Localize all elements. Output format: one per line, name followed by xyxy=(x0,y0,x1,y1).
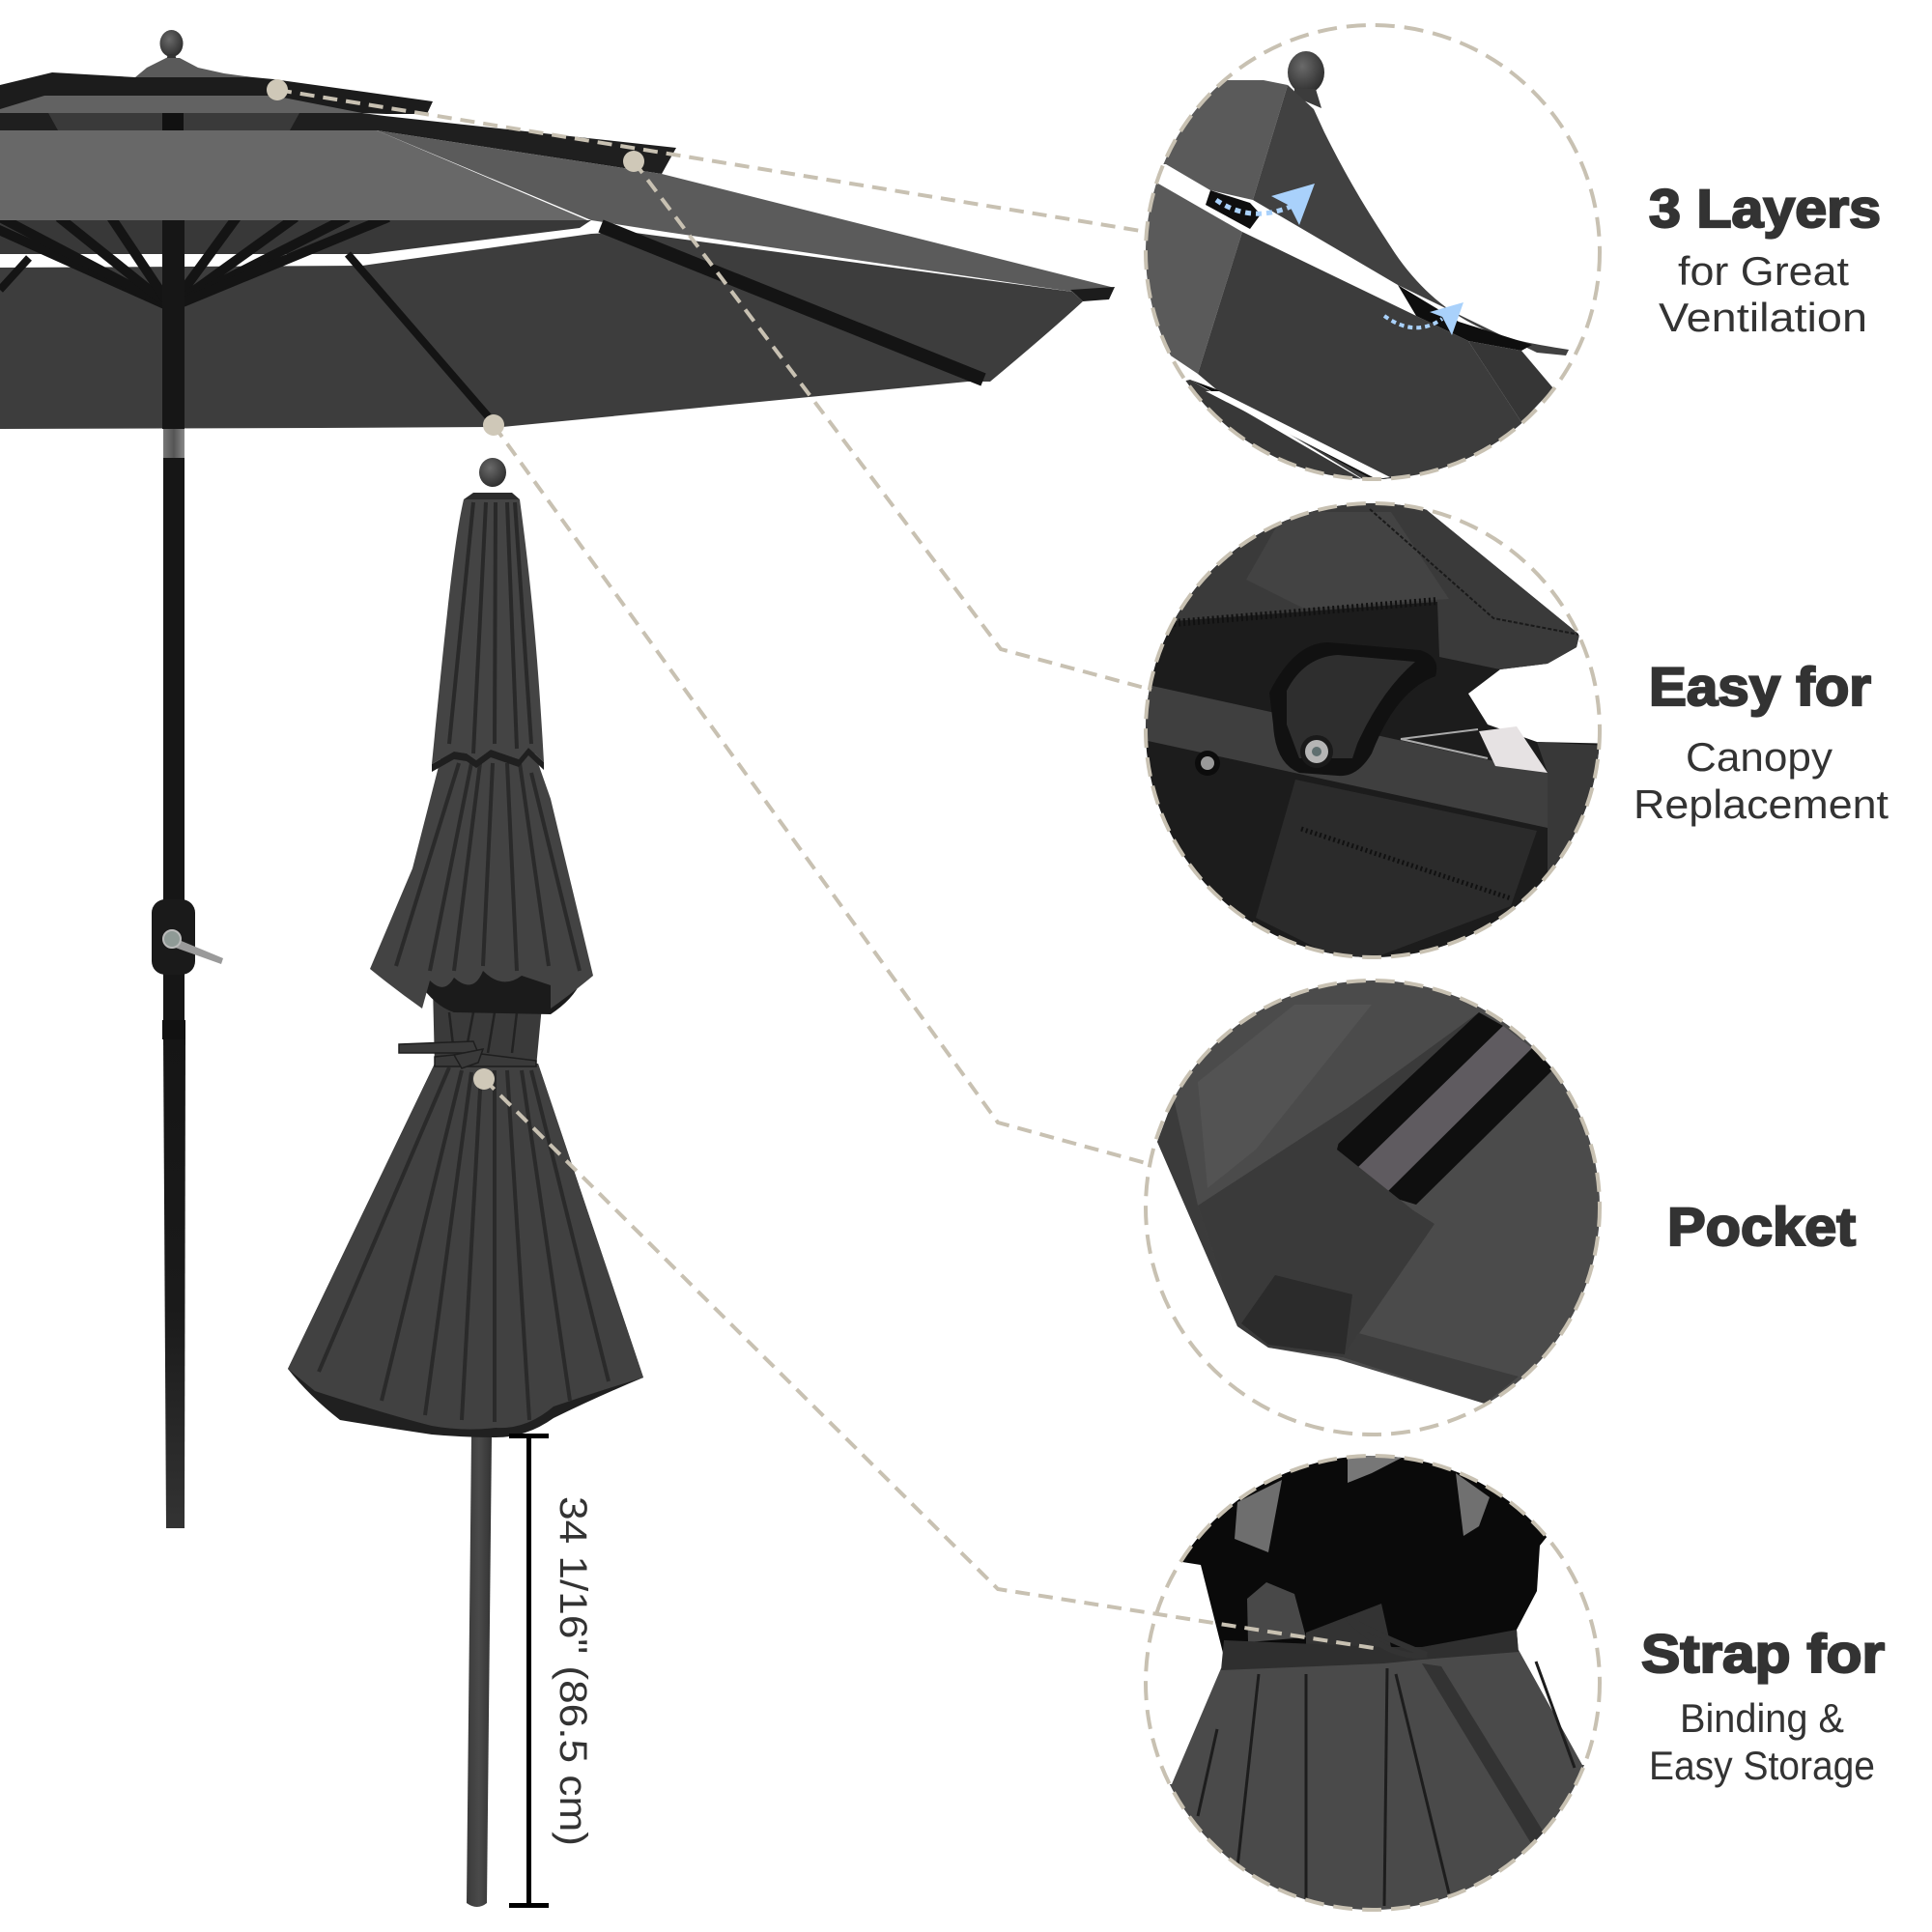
detail circle: strap xyxy=(1111,1401,1642,1932)
pocket xyxy=(1198,1108,1435,1357)
pole height dimension xyxy=(509,1434,594,1908)
callout dots xyxy=(267,79,644,1090)
canopy tip xyxy=(1070,287,1115,301)
airflow arrow lower xyxy=(1384,302,1463,335)
hub and upper pole xyxy=(162,220,185,429)
bottom black strut xyxy=(1190,380,1390,480)
lower main panel xyxy=(1198,232,1522,479)
skirt pleats xyxy=(1198,1662,1575,1906)
text block: easy canopy replacement: Canopy xyxy=(1686,734,1833,780)
detail circle: canopy replacement xyxy=(1146,503,1600,957)
leader line: three layers xyxy=(277,90,1147,232)
wire clip xyxy=(1401,729,1488,758)
middle section xyxy=(370,744,593,1014)
grey fold top xyxy=(1348,1456,1406,1483)
centre pole section xyxy=(162,113,184,130)
top layer panel xyxy=(0,96,362,113)
beam xyxy=(1130,681,1548,828)
fabric highlight xyxy=(1198,1005,1372,1188)
text block: easy canopy replacement xyxy=(1634,656,1889,827)
lower stitched hem xyxy=(1301,829,1511,898)
secondary bolt xyxy=(1195,751,1220,776)
inner grey pleats xyxy=(1247,1582,1306,1642)
leader line: canopy replacement xyxy=(634,161,1151,690)
upper layer dark panel xyxy=(1253,85,1569,355)
dark interior silhouette xyxy=(1146,503,1600,957)
underside of middle layer xyxy=(0,220,591,254)
bracket inner face xyxy=(1287,655,1415,758)
bracket xyxy=(1269,642,1436,776)
finial detail xyxy=(1288,51,1324,108)
grey fold right xyxy=(1456,1473,1490,1536)
closed umbrella pole xyxy=(467,1435,492,1907)
text block: 3 layers: Ventilation xyxy=(1659,295,1867,340)
closed umbrella finial xyxy=(479,458,506,487)
text block: easy canopy replacement: Replacement xyxy=(1634,781,1889,827)
text block: strap: Strap for xyxy=(1641,1623,1885,1684)
bottom hem xyxy=(1343,1333,1519,1404)
top section xyxy=(432,493,544,772)
detail circle: three layers xyxy=(1130,51,1569,502)
seam line xyxy=(1370,509,1579,635)
upper black folds xyxy=(1111,1401,1642,1657)
dashed detail circle outlines xyxy=(1146,25,1600,1910)
right fabric strip xyxy=(1537,742,1600,871)
stitched hem xyxy=(1174,601,1437,623)
bow xyxy=(1348,1618,1427,1656)
text block: 3 layers xyxy=(1649,178,1881,340)
skirt xyxy=(1111,1650,1642,1932)
pocket fabric base xyxy=(1157,980,1600,1404)
closed umbrella xyxy=(288,458,643,1907)
lower strut xyxy=(1398,285,1532,351)
shaded fabric xyxy=(1339,1014,1477,1144)
pocket shadow xyxy=(1241,1275,1352,1354)
text block: 3 layers: for Great xyxy=(1678,248,1849,294)
lower canopy ribs xyxy=(0,226,983,425)
beam xyxy=(1353,1026,1532,1195)
dimension bracket xyxy=(509,1434,549,1908)
middle layer front panel xyxy=(0,130,587,220)
top layer frame xyxy=(0,72,433,114)
strap tail xyxy=(1422,1663,1546,1845)
text block: strap: Easy Storage xyxy=(1649,1743,1875,1788)
neck xyxy=(433,985,544,1067)
lower canopy xyxy=(0,232,1083,429)
lower right panel xyxy=(1468,341,1553,422)
rib fan xyxy=(0,217,388,307)
leader line: strap xyxy=(484,1079,1379,1649)
grey fold left xyxy=(1235,1480,1282,1552)
top finial and cap xyxy=(135,30,253,81)
strap xyxy=(399,1041,536,1068)
pole of open umbrella xyxy=(162,428,185,1528)
left edge hem xyxy=(1157,1098,1237,1326)
leader line: pocket xyxy=(494,425,1146,1163)
inner shade xyxy=(48,113,299,130)
crank handle xyxy=(152,899,223,975)
dimension label: 34 1/16" (86.5 cm) xyxy=(552,1496,594,1846)
lower fabric xyxy=(1256,780,1537,966)
beam top shadow xyxy=(1332,1012,1503,1172)
top fabric xyxy=(1176,503,1579,669)
lower left light panel xyxy=(1146,184,1242,374)
white gap xyxy=(1206,391,1390,479)
bottom dark fabric xyxy=(1186,380,1362,479)
text block: 3 layers: 3 Layers xyxy=(1649,178,1881,239)
waist band xyxy=(1221,1630,1519,1670)
text block: easy canopy replacement: Easy for xyxy=(1649,656,1871,717)
open three-layer umbrella xyxy=(0,30,1115,1528)
white strap xyxy=(1479,726,1548,773)
second layer frame xyxy=(0,113,676,174)
main bolt xyxy=(1300,735,1333,768)
upper layer light panel xyxy=(1163,80,1288,200)
lower skirt xyxy=(288,1064,643,1437)
beam side shadow xyxy=(1384,1048,1553,1205)
airflow arrow upper xyxy=(1216,184,1315,225)
text block: pocket: Pocket xyxy=(1667,1196,1856,1257)
text block: strap xyxy=(1641,1623,1885,1788)
lighter fabric highlight xyxy=(1246,512,1449,609)
middle layer right panel xyxy=(377,130,1115,292)
upper strut xyxy=(1206,190,1261,229)
centre pleat xyxy=(1306,1604,1391,1647)
detail circle: pocket xyxy=(1157,980,1600,1404)
text block: strap: Binding & xyxy=(1680,1695,1844,1741)
